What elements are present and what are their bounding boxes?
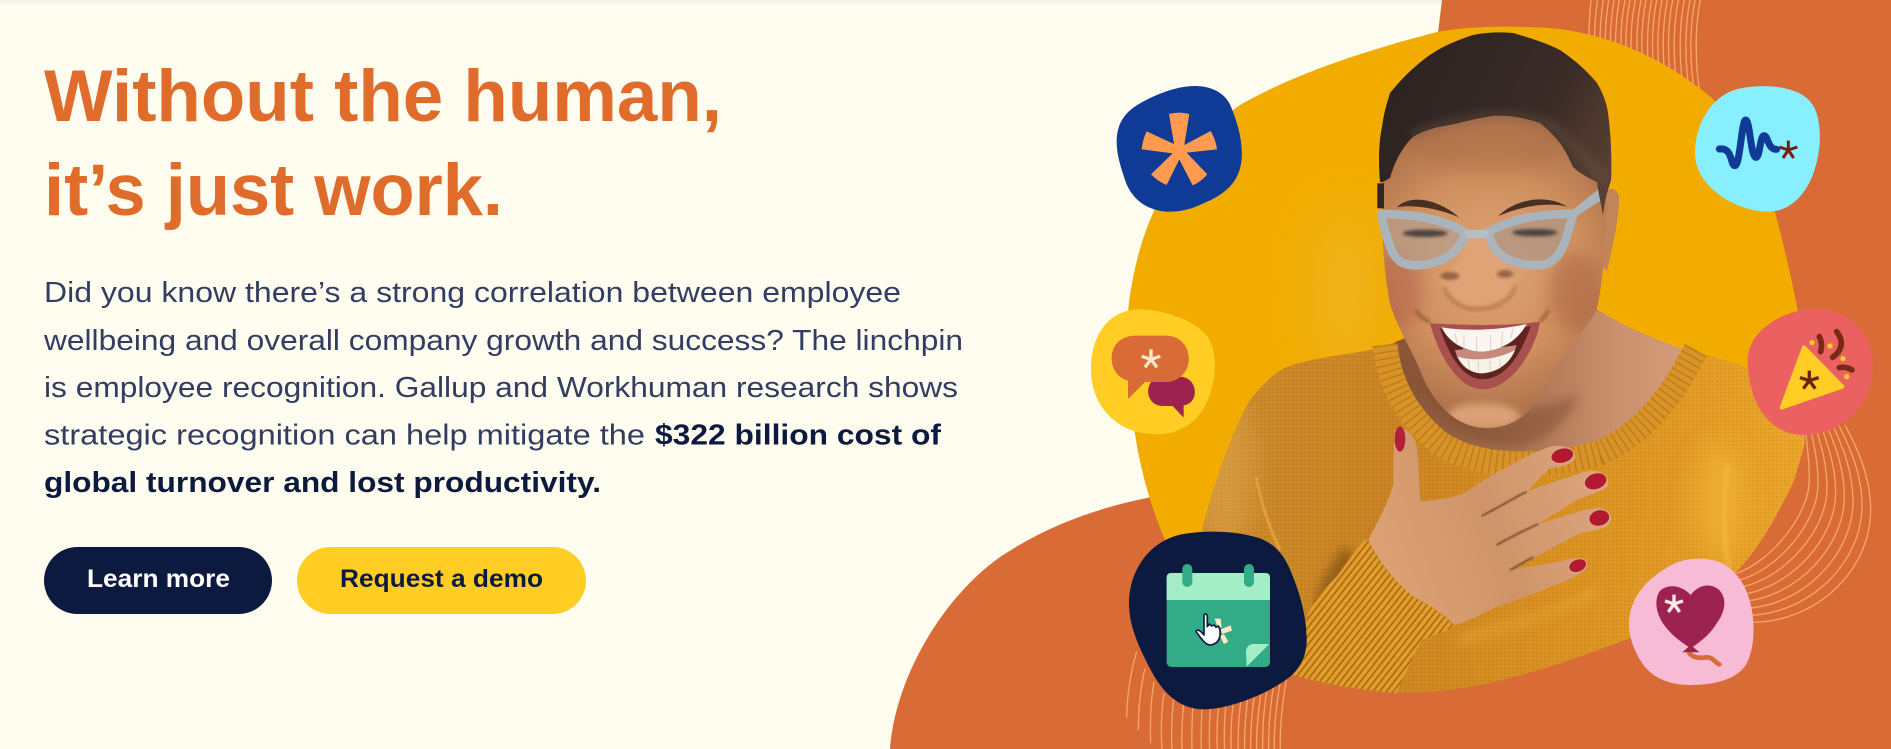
icon: pulse line badge xyxy=(1695,86,1820,212)
body paragraph: $322 billion cost of xyxy=(655,420,941,452)
photo: laughing woman in mustard sweater xyxy=(1180,32,1820,700)
icon: chat bubbles badge xyxy=(1091,309,1215,434)
button: Request a demo: Request a demo xyxy=(340,565,543,593)
neck and chest xyxy=(1395,305,1692,466)
nose xyxy=(1441,237,1516,309)
icon: calendar click badge xyxy=(1129,532,1307,709)
knit cuff xyxy=(1293,540,1455,693)
face xyxy=(1375,97,1607,430)
decorative thin lines: top right xyxy=(1589,0,1700,97)
orange background shape xyxy=(890,0,1891,749)
title xyxy=(44,56,722,231)
body paragraph xyxy=(43,277,963,499)
button: Request a demo xyxy=(297,547,586,614)
decorative thin lines: bottom left xyxy=(1127,652,1287,749)
glasses xyxy=(1377,183,1607,265)
eyebrows xyxy=(1397,200,1459,217)
body paragraph: wellbeing and overall company growth and success? The linchpin xyxy=(43,325,963,357)
button: Learn more: Learn more xyxy=(87,565,230,593)
body paragraph: global turnover and lost productivity. xyxy=(44,467,601,499)
hair xyxy=(1379,32,1611,215)
sweater collar xyxy=(1385,345,1696,464)
button: Learn more xyxy=(44,547,272,614)
decorative thin lines: right arcs xyxy=(1737,425,1871,622)
title: it’s just work. xyxy=(44,150,503,231)
hand with red nails xyxy=(1368,426,1612,625)
smile xyxy=(1430,322,1540,389)
title: Without the human, xyxy=(44,56,722,137)
icon: heart balloon badge xyxy=(1629,559,1754,685)
yellow blob behind person xyxy=(1127,27,1810,620)
icon: blue asterisk badge xyxy=(1117,86,1242,212)
icon: party popper badge xyxy=(1748,309,1873,435)
ear xyxy=(1598,189,1619,271)
sweater xyxy=(1202,342,1805,693)
body paragraph: Did you know there’s a strong correlation between employee xyxy=(44,277,901,309)
body paragraph: is employee recognition. Gallup and Workhuman research shows xyxy=(44,372,958,404)
soft glow beside person xyxy=(1317,205,1373,375)
body paragraph: strategic recognition can help mitigate the xyxy=(44,420,645,452)
